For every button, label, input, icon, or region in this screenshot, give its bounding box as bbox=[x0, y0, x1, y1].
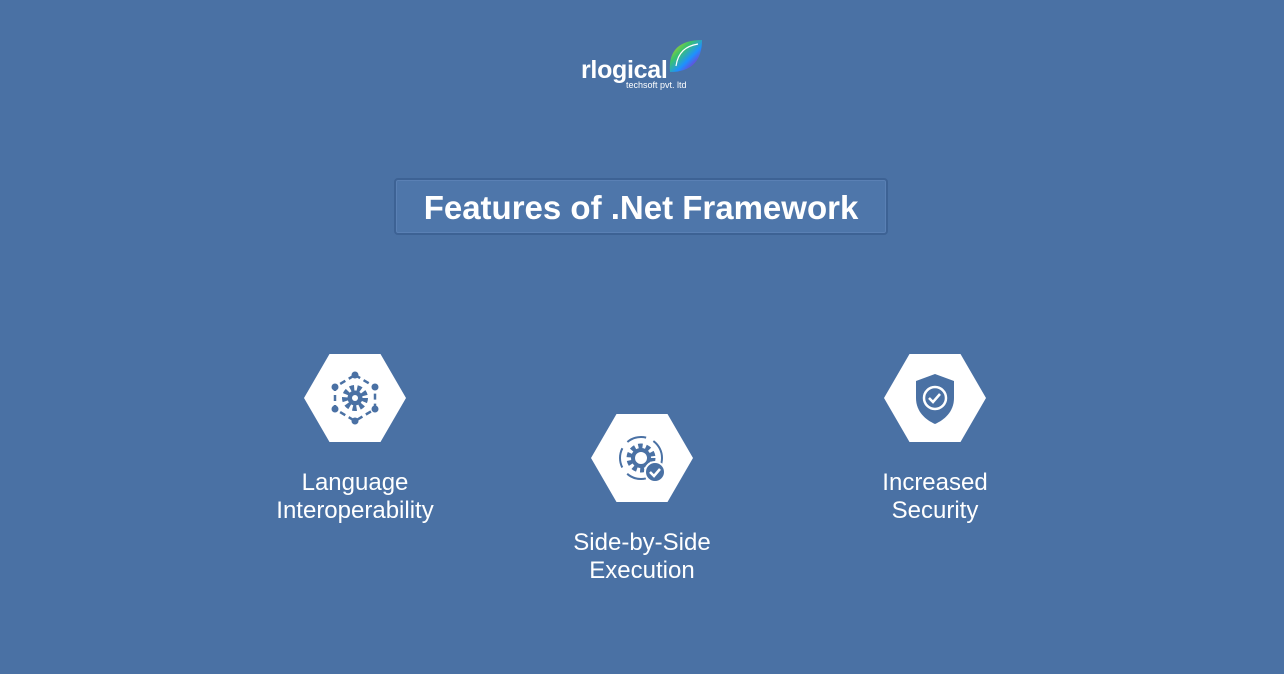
logo text: rlogical bbox=[581, 56, 668, 84]
label: Side-by-Side bbox=[573, 529, 711, 556]
title box bbox=[394, 178, 888, 235]
icon: logo leaf bbox=[670, 40, 702, 72]
feature: Increased Security bbox=[882, 354, 988, 524]
label bbox=[573, 529, 711, 584]
label: Interoperability bbox=[276, 497, 434, 524]
label: Language bbox=[302, 469, 408, 496]
icon: cycle gear hexagon bbox=[591, 414, 693, 502]
feature: Language Interoperability bbox=[276, 354, 434, 524]
label: Security bbox=[892, 497, 978, 524]
feature: Side-by-Side Execution bbox=[573, 414, 711, 584]
logo bbox=[581, 40, 702, 90]
label: Execution bbox=[589, 557, 695, 584]
label bbox=[276, 469, 434, 524]
icon: shield hexagon bbox=[884, 354, 986, 442]
icon: network gear hexagon bbox=[304, 354, 406, 442]
label bbox=[882, 469, 988, 524]
title box: Features of .Net Framework bbox=[424, 189, 858, 226]
logo: techsoft pvt. ltd bbox=[626, 80, 687, 90]
label: Increased bbox=[882, 469, 988, 496]
